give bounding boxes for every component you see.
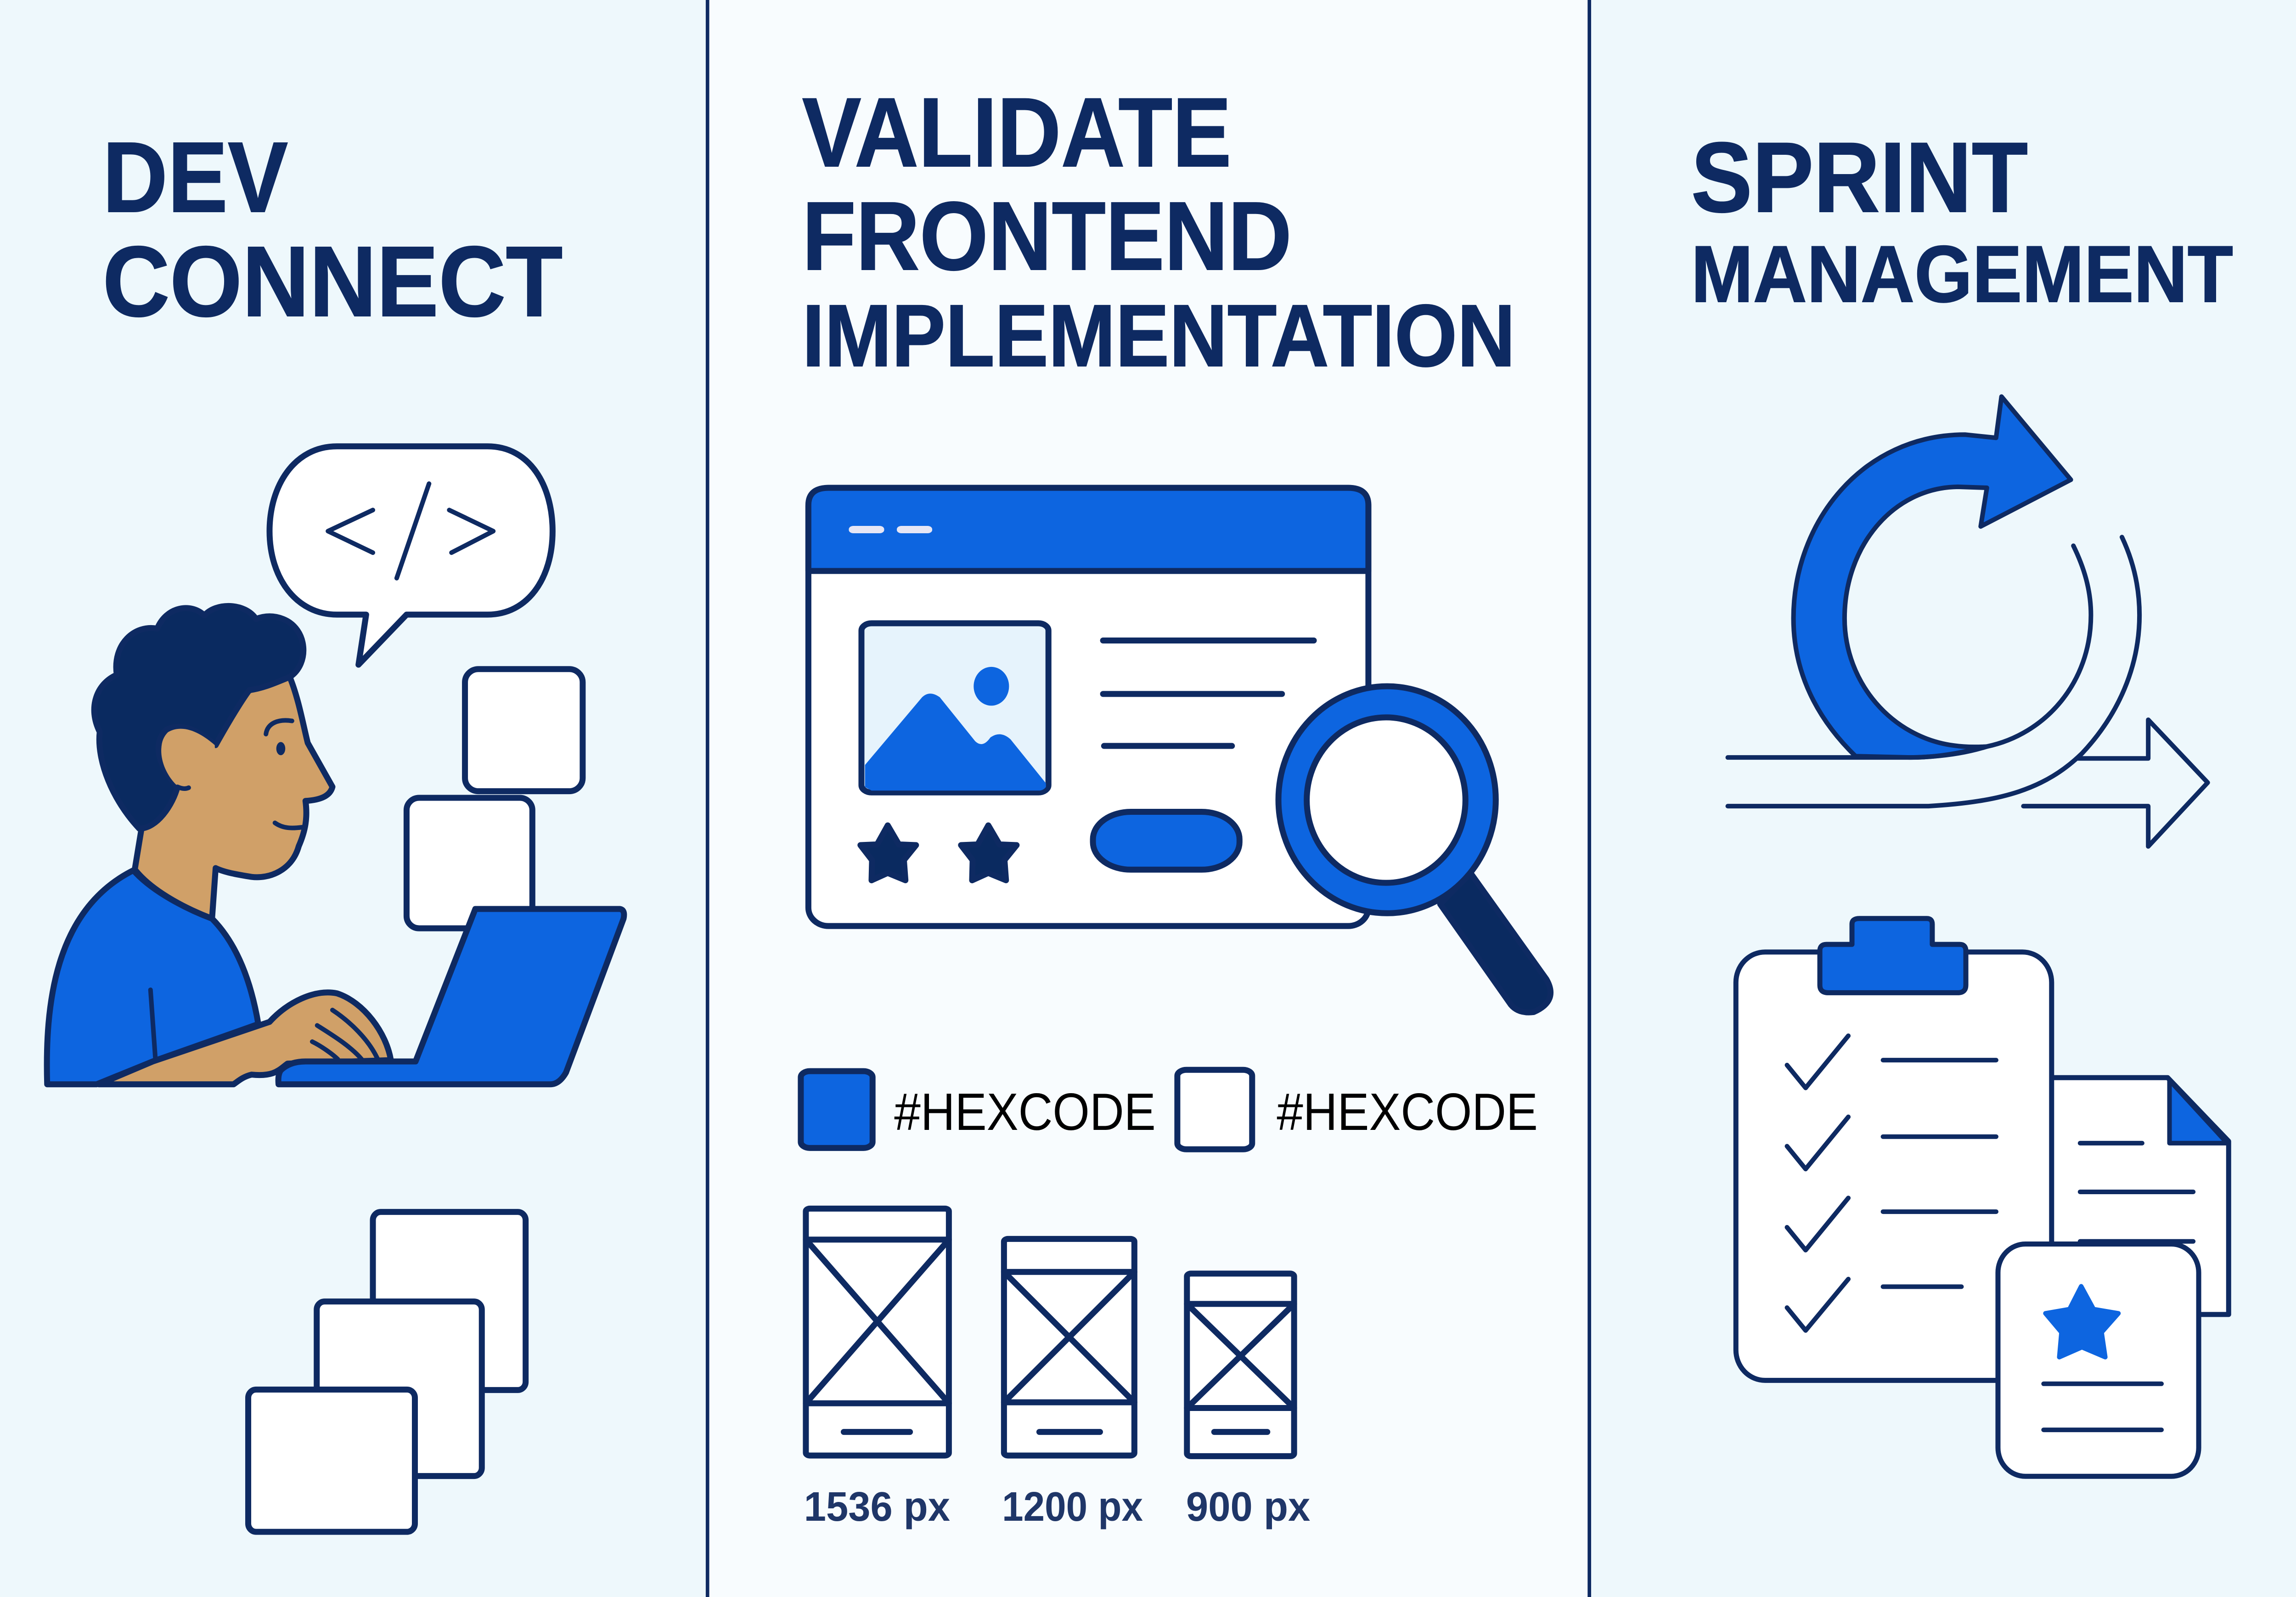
panel: validate frontend implementation — [708, 0, 1589, 1597]
heading: sprint management — [1691, 122, 2233, 319]
clipboard — [1736, 919, 2052, 1380]
wireframe 1200 px — [1002, 1239, 1143, 1529]
heading: validate frontend implementation — [802, 78, 1515, 385]
card with star — [1998, 1244, 2199, 1476]
panel: sprint management — [1589, 0, 2296, 1597]
document behind — [2051, 1078, 2228, 1315]
icon: code speech bubble — [270, 446, 552, 665]
colour swatches and hex codes: #HEXCODE — [1277, 1083, 1538, 1141]
text lines — [1103, 641, 1314, 746]
blank square upper — [465, 669, 583, 791]
window control dashes — [849, 526, 932, 533]
icon: laptop — [278, 909, 624, 1084]
heading: validate frontend implementation: FRONTEND — [802, 182, 1292, 291]
person — [47, 606, 391, 1084]
blank square lower — [406, 798, 532, 928]
colour swatches and hex codes: #HEXCODE — [894, 1083, 1156, 1141]
heading: validate frontend implementation: IMPLEMENTATION — [802, 286, 1515, 385]
heading: sprint management: SPRINT — [1691, 122, 2028, 233]
icon: sprint loop arrow — [1728, 396, 2208, 846]
wireframe 1536 px: 1536 px — [804, 1483, 950, 1529]
wireframe 1536 px — [804, 1208, 950, 1529]
panel: dev connect — [0, 0, 708, 1597]
colour swatches and hex codes — [801, 1070, 1538, 1149]
browser header bar — [808, 488, 1368, 571]
heading: dev connect — [102, 122, 563, 338]
heading: validate frontend implementation: VALIDATE — [802, 78, 1232, 187]
heading: sprint management: MANAGEMENT — [1691, 230, 2233, 319]
image placeholder — [861, 623, 1048, 792]
illustration: clipboard and documents — [1736, 919, 2228, 1476]
heading: dev connect: DEV — [102, 122, 288, 233]
browser window — [808, 488, 1368, 926]
wireframe 1200 px: 1200 px — [1002, 1483, 1143, 1529]
wireframe 900 px — [1186, 1274, 1310, 1529]
magnifier — [1278, 686, 1551, 1012]
heading: dev connect: CONNECT — [102, 226, 563, 338]
stars — [861, 825, 1017, 880]
illustration: browser window with magnifier — [808, 488, 1551, 1012]
button — [1093, 812, 1239, 869]
illustration: developer at laptop — [47, 446, 624, 1084]
stacked blank cards — [248, 1212, 526, 1532]
wireframe 900 px: 900 px — [1186, 1483, 1310, 1529]
